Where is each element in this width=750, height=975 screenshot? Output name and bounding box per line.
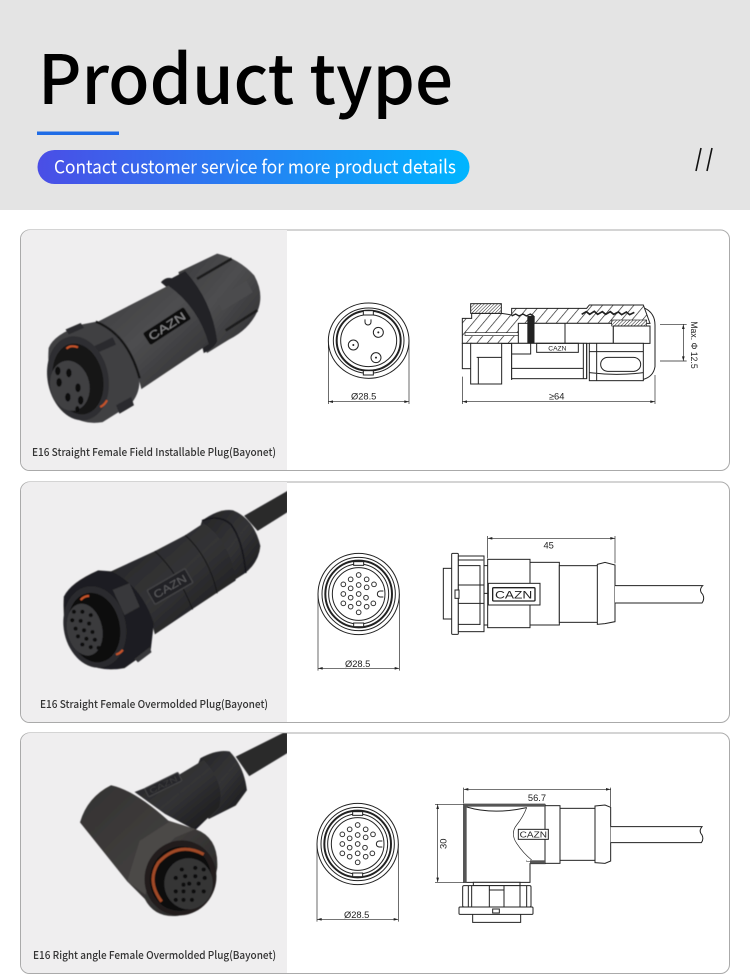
photo background: [21, 482, 287, 722]
logo: CAZN: CAZN: [148, 774, 179, 796]
drawing: side section view: ≥64: [549, 392, 564, 402]
drawing: side view right angle: CAZN: [520, 830, 547, 840]
logo: CAZN: CAZN: [147, 311, 188, 343]
drawing: side view overmolded: 45: [543, 541, 554, 551]
drawing: front view 20-pin: Ø28.5: [344, 910, 369, 920]
photo: straight overmolded connector: [56, 489, 290, 674]
drawing: side section view: Max. Φ 12.5: [689, 321, 699, 369]
drawing: front view 3-pin: [328, 303, 409, 404]
caption: E16 Straight Female Field Installable Plug(Bayonet): [32, 444, 276, 460]
photo: right angle connector: [80, 733, 290, 926]
drawing: side view right angle: 30: [438, 839, 448, 849]
header band: [0, 0, 750, 210]
logo: CAZN: CAZN: [152, 573, 189, 601]
logo: CAZN: [145, 772, 182, 797]
title: Product type: [38, 25, 453, 124]
panel: straight overmolded plug: [20, 482, 730, 722]
drawing: side view overmolded: CAZN: [495, 590, 532, 602]
caption: E16 Straight Female Overmolded Plug(Bayonet): [40, 696, 268, 712]
drawing: front view 20-pin: [317, 803, 398, 922]
drawing: side view right angle: [435, 788, 703, 922]
photo background: [21, 733, 287, 973]
photo: straight field installable connector: [39, 254, 260, 426]
logo: CAZN: [143, 307, 191, 345]
panel: right angle overmolded plug: [20, 733, 730, 974]
drawing: front view 20-pin: Ø28.5: [345, 659, 370, 669]
subtitle pill: Contact customer service for more product details: [54, 154, 456, 180]
logo: CAZN: [147, 569, 193, 604]
slash marks: [696, 148, 712, 171]
drawing: front view 20-pin: [318, 553, 399, 671]
photo background: [21, 230, 287, 470]
drawing: front view 3-pin: Ø28.5: [351, 392, 376, 402]
drawing: side section view: [462, 304, 699, 404]
drawing: side section view: CAZN: [548, 346, 567, 353]
title underline: [37, 132, 119, 135]
caption: E16 Right angle Female Overmolded Plug(Bayonet): [33, 947, 276, 963]
drawing: side view right angle: 56.7: [528, 793, 546, 803]
panel: field installable plug: [20, 230, 730, 470]
drawing: side view overmolded: [443, 536, 704, 634]
